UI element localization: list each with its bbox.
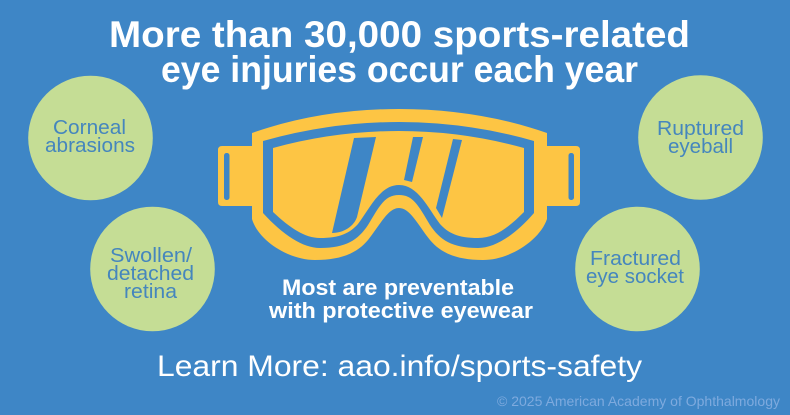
panel: corneal abrasions — [28, 76, 153, 200]
text: learn more link: Learn More: aao.info/sports-safety — [157, 350, 642, 383]
panel: fractured eye socket: Fractured — [590, 247, 681, 270]
icon: goggles — [218, 109, 580, 260]
panel: fractured eye socket: eye socket — [586, 265, 684, 288]
panel: fractured eye socket — [575, 207, 700, 331]
panel: swollen or detached retina: detached — [107, 262, 194, 285]
panel: swollen or detached retina: Swollen/ — [110, 244, 192, 267]
panel: swollen or detached retina: retina — [124, 280, 178, 303]
text: prevention message: Most are preventable — [282, 275, 514, 300]
panel: corneal abrasions: Corneal — [53, 116, 126, 139]
title: eye injuries occur each year — [161, 49, 638, 90]
title: More than 30,000 sports-related — [109, 14, 690, 55]
panel: ruptured eyeball: eyeball — [668, 135, 733, 158]
panel: ruptured eyeball: Ruptured — [657, 117, 744, 140]
panel: corneal abrasions: abrasions — [45, 134, 135, 157]
text: copyright: © 2025 American Academy of Ophthalmology — [497, 393, 780, 409]
text: prevention message: with protective eyewear — [268, 298, 533, 323]
panel: ruptured eyeball — [638, 75, 763, 200]
text: prevention message — [268, 275, 533, 323]
panel: swollen or detached retina — [90, 207, 215, 331]
title — [109, 14, 690, 90]
